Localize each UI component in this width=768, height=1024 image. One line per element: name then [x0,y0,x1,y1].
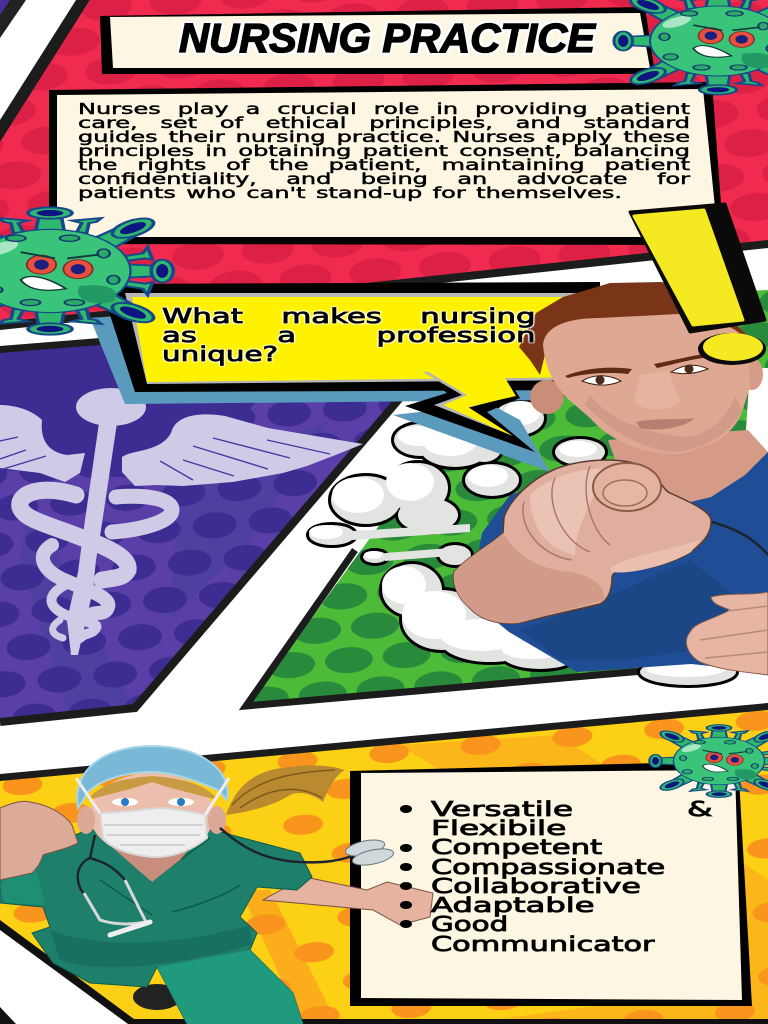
man brows and eyes [565,353,712,385]
stethoscope [78,828,352,935]
panel: red background [0,0,768,330]
man nose and mouth [634,370,695,430]
nurse right arm [263,877,433,925]
panel: intro text box [49,82,724,245]
icon: virus top right [614,0,768,95]
man ears [530,380,564,414]
top-left corner bands [0,0,90,144]
nurse cap [77,746,228,808]
panel: green action burst [246,290,768,708]
panel: qualities box [350,761,752,1006]
nurse mask [76,778,229,857]
nurse neck [113,848,190,882]
qualities list: Collaborative [431,874,641,898]
title banner [100,7,655,74]
paragraph text: principles in obtaining patient consent, balancing [78,142,690,160]
paragraph text: the rights of the patient, maintaining patient [78,156,690,174]
icon: exclamation mark [630,204,766,365]
nurse ponytail [226,765,345,815]
icon: caduceus [0,388,363,655]
qualities list: Communicator [431,932,655,956]
question text: as a profession [162,323,536,347]
paragraph text [78,100,690,202]
panel: yellow qualities background [0,703,768,1024]
question text [160,304,536,368]
paragraph text: confidentiality, and being an advocate for [78,170,690,188]
nurse left fist [0,801,78,880]
man neck [608,430,768,505]
icon: virus bottom right [649,725,768,797]
callout: speech bubble [90,282,600,472]
qualities list: Versatile & [431,797,713,821]
nurse boot [133,984,181,1010]
man pointing [454,282,768,675]
paragraph text: patients who can't stand-up for themselves. [78,184,622,202]
man face [543,314,750,454]
nurse hero [0,746,433,1024]
nurse scrubs [0,830,312,1024]
qualities list [400,797,713,956]
nurse head [77,773,226,857]
man scrubs [470,440,768,672]
qualities list: Competent [431,835,602,859]
title text: NURSING PRACTICE [179,15,597,61]
man arm and fist [454,460,711,623]
panel: purple caduceus [0,338,402,726]
qualities list: Flexibile [431,816,566,840]
paragraph text: guides their nursing practice. Nurses apply these [78,128,690,146]
question text: unique? [162,342,278,366]
paragraph text: care, set of ethical principles, and standard [78,114,690,132]
paragraph text: Nurses play a crucial role in providing patient [78,100,690,118]
nurse eyes [112,798,194,806]
stethoscope tube [712,522,768,555]
man hair [519,282,760,375]
caduceus wings [0,405,363,486]
qualities list: Adaptable [431,893,595,917]
man left hand [686,592,768,675]
icon: virus left [0,207,173,335]
intro box fill [57,89,718,237]
stethoscope chest piece [344,837,395,868]
qualities list: Compassionate [431,855,665,879]
question text: What makes nursing [162,304,536,328]
cloud puffs [309,401,736,685]
qualities list: Good [431,912,508,936]
caduceus snakes [20,490,172,638]
